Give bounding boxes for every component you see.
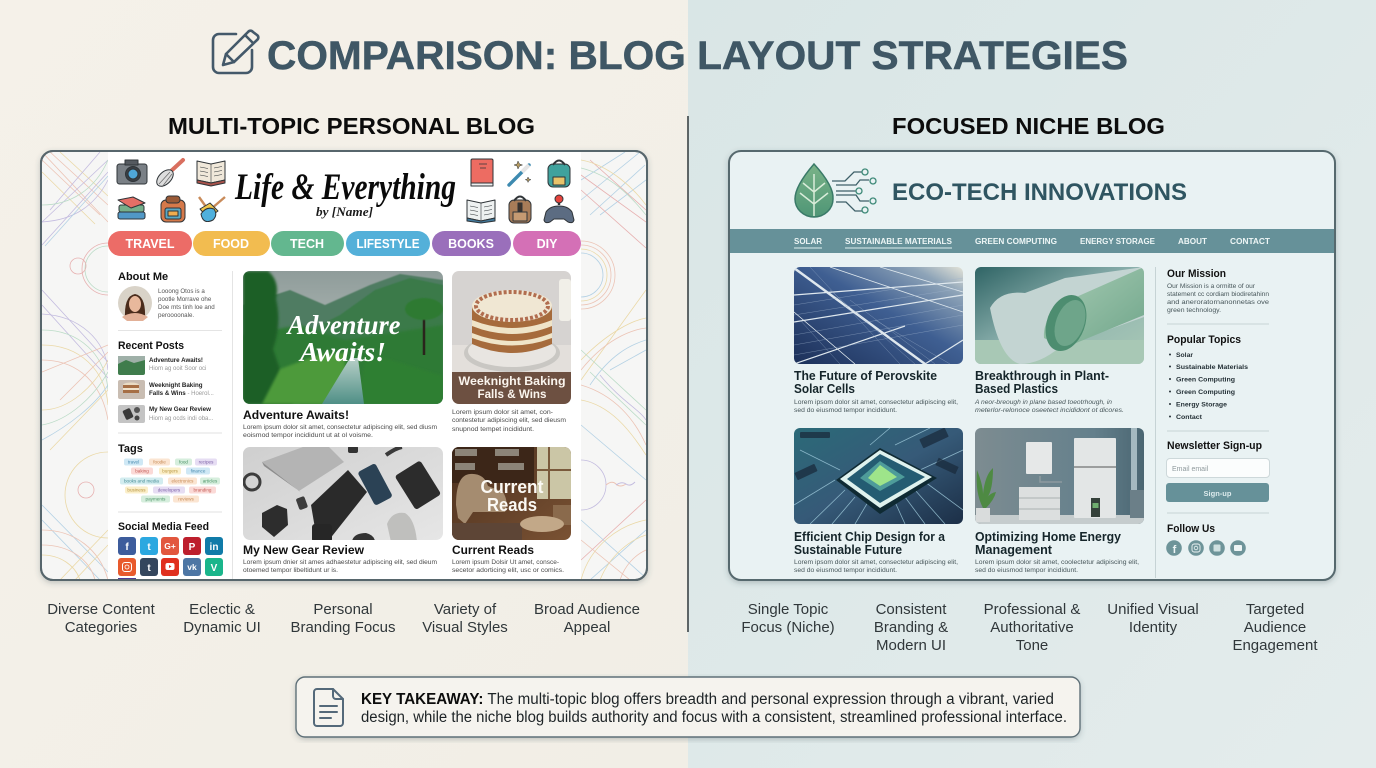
- takeaway text: KEY TAKEAWAY: The multi-topic blog offers breadth and personal expression through a vibrant, varied: [361, 691, 1054, 708]
- pill: diy: [513, 231, 581, 256]
- heading: niche: FOCUSED NICHE BLOG: [892, 113, 1165, 139]
- pill: travel: TRAVEL: [125, 237, 175, 251]
- image: circuit chip: [794, 428, 963, 524]
- image: home energy storage: [975, 428, 1144, 524]
- caption: Visual Styles: [422, 619, 508, 636]
- card: current reads: Lorem ipsum Dolsir Ut amet, consce-: [452, 559, 559, 566]
- category pills: [108, 231, 581, 256]
- caption: Categories: [65, 619, 137, 636]
- article: perovskite: Solar Cells: [794, 382, 855, 396]
- caption: Professional &: [984, 601, 1080, 618]
- navigation bar: ABOUT: [1178, 237, 1207, 246]
- image: layered cake: [452, 271, 571, 404]
- icon: blue open book: [467, 200, 495, 223]
- sidebar: social media feed: P: [189, 542, 196, 553]
- sidebar: tags: branding: [194, 488, 212, 493]
- icon: open book: [197, 161, 225, 186]
- blog title: Life & Everything: [234, 167, 456, 208]
- caption: Tone: [1016, 637, 1048, 654]
- sidebar: tags: finance: [191, 469, 206, 474]
- card: adventure awaits: Lorem ipsum dolor sit amet, consectetur adipiscing elit, sed diusm: [243, 424, 437, 431]
- sidebar: social media feed: in: [210, 542, 218, 553]
- heading: multi-topic: MULTI-TOPIC PERSONAL BLOG: [168, 113, 535, 139]
- sidebar: popular topics: Energy Storage: [1176, 402, 1227, 408]
- avatar: [118, 286, 152, 321]
- sidebar: about me: About Me: [118, 271, 168, 283]
- caption: Diverse Content: [47, 601, 155, 618]
- card: my new gear review: Lorem ipsum dnier sit ames adhaestetur adipiscing elit, sed dieum: [243, 559, 437, 566]
- card: weeknight baking: contestetur adipiscing elit, sed dieusm: [452, 417, 566, 424]
- icon: brown backpack: [509, 196, 531, 223]
- pill: travel: [108, 231, 192, 256]
- post 3: [118, 405, 214, 423]
- post 1: Adventure Awaits!: [149, 357, 203, 364]
- caption: Identity: [1129, 619, 1178, 636]
- image: jungle valley: Adventure: [286, 310, 401, 340]
- sidebar: follow us: Follow Us: [1167, 523, 1215, 535]
- article: perovskite: sed do eiusmod tempor incididunt.: [794, 407, 897, 414]
- article: home energy: Lorem ipsum dolor sit amet, coolectetur adipiscing elit,: [975, 559, 1139, 566]
- icon: teal backpack: [548, 160, 570, 187]
- sign-up button: Sign-up: [1204, 489, 1232, 498]
- sidebar: tags: books and media: [124, 479, 159, 484]
- pill: books: [432, 231, 511, 256]
- sidebar: popular topics: Green Computing: [1176, 389, 1235, 396]
- post 3: Hiom ag ocds indi oba...: [149, 416, 214, 422]
- sidebar: our mission: and aneroratornanonnetas ove: [1167, 299, 1270, 306]
- sidebar: tags: business: [127, 488, 146, 493]
- card: my new gear review: My New Gear Review: [243, 543, 365, 557]
- article: home energy: Optimizing Home Energy: [975, 530, 1121, 544]
- sidebar: our mission: statement cc cordiam biodiretahinn: [1167, 291, 1270, 298]
- card: weeknight baking: Lorem ipsum dolor sit amet, con-: [452, 409, 553, 416]
- sidebar: follow us: [1166, 523, 1246, 556]
- sidebar: about me: [118, 271, 215, 321]
- background: left half: [0, 0, 688, 768]
- sidebar: recent posts: Falls & Wins - Hoerol...: [149, 390, 214, 397]
- icon: book stack: [118, 197, 145, 219]
- feature captions: multi-topic: [47, 601, 640, 636]
- site title: ECO-TECH INNOVATIONS: [892, 179, 1187, 206]
- icon cluster: left: [117, 160, 225, 222]
- pill: lifestyle: [346, 231, 430, 256]
- card: weeknight baking: [452, 271, 571, 433]
- sidebar: social media feed: V: [211, 563, 218, 574]
- article: home energy: sed do eiusmod tempor incididunt.: [975, 567, 1078, 574]
- caption: Eclectic &: [189, 601, 255, 618]
- article: home energy: [975, 428, 1144, 574]
- sidebar: tags: recipes: [199, 460, 214, 465]
- caption: Engagement: [1232, 637, 1318, 654]
- callout: key takeaway: [296, 677, 1080, 737]
- sidebar: newsletter sign-up: [1166, 440, 1270, 502]
- article: chip design: sed do eiusmod tempor incididunt.: [794, 567, 897, 574]
- sidebar: our mission: green technology.: [1167, 307, 1221, 314]
- sidebar: tags: electronics: [172, 479, 194, 484]
- sidebar: recent posts: [118, 340, 214, 423]
- article: plant-based plastics: Breakthrough in Plant-: [975, 369, 1109, 383]
- sidebar: popular topics: Sustainable Materials: [1176, 364, 1248, 371]
- article: plant-based plastics: Based Plastics: [975, 382, 1058, 396]
- title: [213, 31, 1128, 78]
- sidebar: social media feed: G+: [164, 541, 176, 551]
- panel: multi-topic personal blog mockup: [41, 151, 647, 582]
- image: layered cake: Falls & Wins: [478, 387, 547, 401]
- pill: lifestyle: LIFESTYLE: [356, 237, 420, 251]
- navigation bar: SUSTAINABLE MATERIALS: [845, 237, 953, 246]
- caption: Dynamic UI: [183, 619, 261, 636]
- article: perovskite: Lorem ipsom dolor sit amet, consectetur adipiscing elit,: [794, 399, 958, 406]
- article: plant-based plastics: A neor-breough in plane based toeotrhough, in: [974, 399, 1113, 406]
- navigation bar: [730, 229, 1334, 253]
- article: perovskite: The Future of Perovskite: [794, 369, 937, 383]
- card: current reads: Current Reads: [452, 543, 534, 557]
- icon: whisk: [154, 160, 183, 189]
- pill: books: BOOKS: [448, 237, 494, 251]
- image: flat lay of gadgets: [243, 440, 443, 542]
- sidebar: tags: articles: [203, 479, 218, 484]
- card: adventure awaits: eoismod tempor incididunt ut at ol voisme.: [243, 432, 373, 439]
- caption: Branding Focus: [290, 619, 396, 636]
- card: adventure awaits: Adventure Awaits!: [243, 408, 349, 422]
- image: reading nook: [452, 447, 571, 540]
- image: solar panels: [794, 267, 963, 364]
- sidebar: tags: food: [179, 460, 188, 465]
- card: my new gear review: otoemed tempor libeltidunt ur is.: [243, 567, 338, 574]
- navigation bar: GREEN COMPUTING: [975, 237, 1057, 246]
- sidebar: social media feed: Social Media Feed: [118, 521, 209, 533]
- article: chip design: Efficient Chip Design for a: [794, 530, 946, 544]
- sidebar: about me: Looong Otos is a: [158, 288, 205, 295]
- sidebar: tags: burgers: [162, 469, 178, 474]
- icon: red book: [471, 159, 493, 186]
- icon cluster: right: [467, 159, 574, 223]
- image: jungle valley: [243, 271, 443, 404]
- post 1: [118, 356, 206, 375]
- icon: pencil on square: [213, 31, 258, 73]
- sidebar: social media feed: [118, 521, 223, 582]
- article: perovskite: [794, 267, 963, 414]
- caption: Targeted: [1246, 601, 1304, 618]
- sidebar: tags: payments: [146, 497, 166, 502]
- image: reading nook: Reads: [487, 495, 537, 515]
- sidebar: tags: reviews: [178, 497, 194, 502]
- caption: Audience: [1244, 619, 1306, 636]
- pill: diy: DIY: [537, 237, 558, 251]
- card: current reads: secetor adorticing elit, usc or comics.: [452, 567, 564, 574]
- caption: Personal: [313, 601, 373, 618]
- navigation bar: ENERGY STORAGE: [1080, 237, 1156, 246]
- sidebar: about me: peroooonale.: [158, 312, 194, 319]
- sidebar: about me: Doe mts tinh loe and: [158, 304, 215, 311]
- sidebar: our mission: Our Mission is a ormitte of our: [1167, 283, 1255, 290]
- navigation bar: CONTACT: [1230, 237, 1270, 246]
- sidebar: popular topics: Green Computing: [1176, 376, 1235, 384]
- byline: by [Name]: [316, 204, 373, 219]
- icon: magic wand: [509, 161, 531, 185]
- icon: document: [314, 689, 343, 726]
- image: reading nook: Current: [480, 477, 544, 497]
- sidebar: social media feed: f: [125, 542, 129, 553]
- callout: key takeaway: design, while the niche blog builds authority and focus with a consistent, streamlined professional interface.: [361, 709, 1067, 726]
- image: layered cake: Weeknight Baking: [458, 374, 566, 388]
- navigation bar: SOLAR: [794, 237, 822, 246]
- caption: Single Topic: [748, 601, 828, 618]
- card: weeknight baking: snupnod tempet incididunt.: [452, 426, 534, 433]
- caption: Broad Audience: [534, 601, 640, 618]
- post 3: My New Gear Review: [149, 406, 211, 413]
- icon: broom and dustpan: [199, 197, 225, 222]
- article: chip design: Sustainable Future: [794, 543, 902, 557]
- pill: tech: TECH: [290, 237, 324, 251]
- sidebar: tags: travel: [128, 460, 139, 465]
- sidebar: tags: Tags: [118, 443, 143, 455]
- article: plant-based plastics: [974, 267, 1144, 414]
- sidebar: tags: [118, 443, 220, 502]
- page column: [108, 152, 581, 580]
- sidebar: recent posts: Weeknight Baking: [149, 382, 203, 389]
- heading text: COMPARISON: BLOG LAYOUT STRATEGIES: [267, 34, 1128, 78]
- icon: joystick controller: [544, 195, 574, 223]
- caption: Branding &: [874, 619, 948, 636]
- article: chip design: [794, 428, 963, 574]
- social icons: f: [1173, 544, 1177, 556]
- article: home energy: Management: [975, 543, 1053, 557]
- sidebar: social media feed: t: [147, 542, 151, 553]
- sidebar: social media feed: vk: [187, 562, 197, 572]
- background: right half: [688, 0, 1376, 768]
- article: chip design: Lorem ipsom dolor sit amet, consectetur adipiscing elit,: [794, 559, 958, 566]
- pill: food: [193, 231, 270, 256]
- caption: Variety of: [434, 601, 496, 618]
- caption: Focus (Niche): [741, 619, 835, 636]
- sidebar: social media feed: t: [147, 563, 151, 574]
- icon: camera: [117, 160, 147, 184]
- sidebar: tags: developers: [158, 488, 181, 493]
- pill: food: FOOD: [213, 237, 249, 251]
- sidebar: popular topics: Popular Topics: [1167, 334, 1241, 346]
- logo: leaf with circuit lines: [795, 164, 876, 217]
- caption: Consistent: [876, 601, 946, 618]
- sidebar: popular topics: Contact: [1176, 414, 1203, 421]
- card: current reads: [452, 447, 571, 574]
- post 1: Hiom ag ooit Soor oci: [149, 366, 206, 372]
- image: bioplastic rolls: [975, 267, 1144, 364]
- sidebar: our mission: Our Mission: [1167, 268, 1226, 280]
- caption: Modern UI: [876, 637, 946, 654]
- panel: focused niche blog mockup: [729, 151, 1335, 580]
- card: adventure awaits: [243, 271, 443, 439]
- caption: Authoritative: [990, 619, 1074, 636]
- icon: orange backpack: [161, 196, 185, 222]
- sidebar: popular topics: [1167, 334, 1248, 421]
- sidebar: about me: pootle Morrave ohe: [158, 296, 212, 303]
- sidebar: popular topics: Solar: [1176, 352, 1193, 359]
- feature captions: niche: [741, 601, 1318, 654]
- caption: Appeal: [564, 619, 610, 636]
- sidebar: recent posts: Recent Posts: [118, 340, 184, 352]
- caption: Unified Visual: [1107, 601, 1199, 618]
- email input: Email email: [1172, 466, 1209, 473]
- sidebar: tags: baking: [135, 469, 149, 474]
- sidebar: our mission: [1167, 268, 1270, 314]
- post 2: [118, 380, 145, 399]
- sidebar: newsletter sign-up: Newsletter Sign-up: [1167, 440, 1262, 452]
- sidebar: tags: foodie: [153, 460, 166, 465]
- pill: tech: [271, 231, 344, 256]
- card: my new gear review: [243, 440, 443, 574]
- image: jungle valley: Awaits!: [298, 337, 386, 367]
- article: plant-based plastics: meterlor-relonoce oseetect incididont ot dicores.: [975, 407, 1124, 414]
